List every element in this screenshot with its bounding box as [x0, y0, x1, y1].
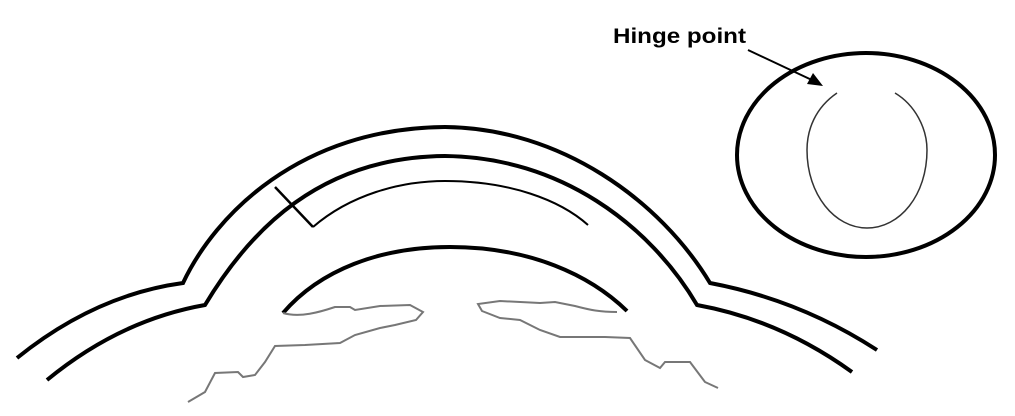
flap incision arc — [313, 181, 588, 227]
hinge point label: Hinge point — [613, 25, 746, 48]
inner cornea line — [47, 156, 852, 380]
flap thickness bracket — [275, 187, 313, 227]
lens anterior surface — [283, 247, 627, 313]
arrow to hinge point — [748, 50, 823, 86]
flap cut outline — [807, 93, 927, 228]
iris right — [478, 301, 718, 388]
flap top view ellipse — [737, 53, 995, 257]
outer cornea line — [17, 127, 877, 358]
iris left — [188, 305, 423, 402]
